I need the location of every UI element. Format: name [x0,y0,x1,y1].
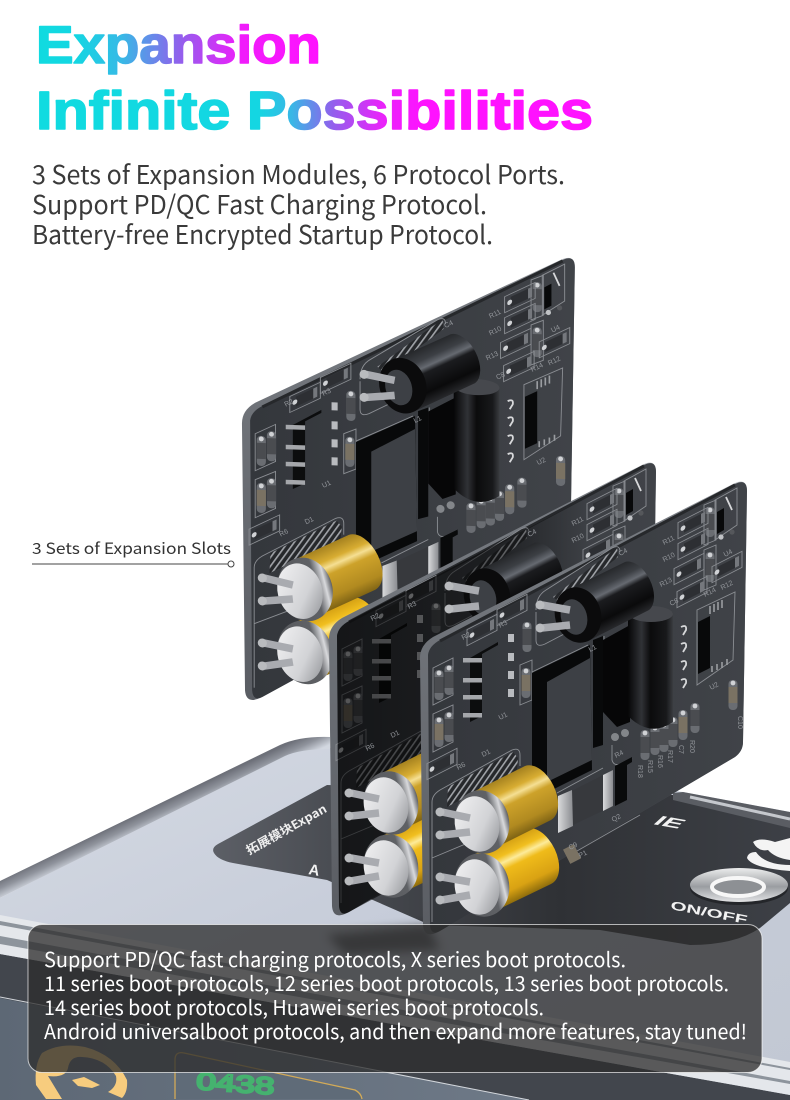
panel letters IE: IE [649,813,690,832]
rear card silkscreen labels: R2 [283,398,295,409]
front card silkscreen labels: R10 [662,552,676,564]
front card silkscreen labels: D1 [481,748,492,759]
info panel [28,924,762,1072]
front face edge line [0,997,529,1100]
rear card silkscreen labels: R13 [485,351,500,362]
device top surface [0,748,790,1100]
on/off label: ON/OFF [669,898,749,927]
front card silkscreen labels: R12 [720,580,734,592]
front card silkscreen labels: R14 [703,587,717,599]
info panel text [44,943,747,1045]
icon: mascot white [747,838,790,871]
front card silkscreen labels: R20 [688,740,695,753]
middle card silkscreen labels: D1 [390,729,401,740]
device back edge bevel [0,737,330,898]
front card silkscreen labels: P1 [578,850,589,860]
icon: power button [690,868,788,905]
front card silkscreen labels: R13 [659,577,673,589]
rear card silkscreen labels: C8 [495,372,507,382]
front card silkscreen labels: R11 [662,535,676,547]
device dark front band [0,954,790,1100]
front card silkscreen labels: R6 [456,761,467,772]
rear card silkscreen labels: U1 [321,480,332,490]
info panel text: 14 series boot protocols, Huawei series boot protocols. [44,991,544,1021]
rear card silkscreen labels: R12 [547,356,562,367]
subtitle text block [32,155,565,252]
rear card silkscreen labels: D1 [304,516,315,526]
subtitle text block: Support PD/QC Fast Charging Protocol. [32,185,487,222]
front card silkscreen labels: R15 [646,760,653,773]
front card silkscreen labels: C7 [677,745,684,754]
module card: front [420,482,747,934]
title: Expansion [36,16,321,75]
info panel text: 11 series boot protocols, 12 series boot protocols, 13 series boot protocols. [44,967,729,997]
info panel text: Support PD/QC fast charging protocols, X series boot protocols. [44,943,626,973]
title [36,16,593,141]
callout: expansion slots [32,537,234,567]
front card silkscreen labels: C10 [736,716,743,729]
rear card silkscreen labels: U4 [550,324,562,334]
middle card silkscreen labels: R2 [370,612,381,623]
front card silkscreen labels: R18 [636,765,643,778]
rear card silkscreen labels: R11 [488,309,502,320]
rear card silkscreen labels: L1 [413,415,423,425]
front rail stripes [0,915,790,1095]
front card silkscreen labels: R3 [498,619,509,630]
device front face [0,998,529,1100]
middle card silkscreen labels: R6 [365,742,376,753]
front card silkscreen labels: C9 [568,841,579,852]
title: Infinite Possibilities [36,81,593,141]
front card silkscreen labels: U2 [709,681,720,692]
middle card silkscreen labels: R3 [407,600,418,611]
dark control panel [213,785,790,945]
middle card silkscreen labels: R10 [571,533,585,545]
rear card silkscreen labels [278,301,562,548]
module card: middle [329,463,656,915]
module card: rear [242,247,575,711]
subtitle text block: Battery-free Encrypted Startup Protocol. [32,215,493,252]
display frame [175,1053,362,1100]
rim highlight [690,797,790,819]
icon: gold mascot [36,1045,127,1099]
card contact shadow [327,925,440,955]
front card silkscreen labels: U1 [498,711,509,722]
front card silkscreen labels: R4 [614,749,625,760]
panel letter A: A [307,861,321,880]
front card silkscreen labels: R16 [656,755,663,768]
rear card silkscreen labels: C4 [443,320,455,330]
middle card silkscreen labels: C4 [527,528,538,539]
rear card silkscreen labels: U2 [536,457,547,467]
callout: expansion slots: 3 Sets of Expansion Slots [32,537,231,559]
front card silkscreen labels: C8 [669,597,680,608]
subtitle text block: 3 Sets of Expansion Modules, 6 Protocol Ports. [32,155,565,192]
front card silkscreen labels: L1 [588,644,598,654]
display digits: 0438 [196,1068,275,1100]
panel label chinese and english: 拓展模块Expan [243,800,330,858]
front card silkscreen labels: R2 [461,631,472,642]
front card silkscreen labels: Q2 [611,813,622,824]
panel rear silver rim [673,792,790,828]
rear card silkscreen labels: R3 [321,388,332,398]
rear card silkscreen labels: R10 [488,326,503,337]
rear card silkscreen labels: R14 [530,362,545,374]
front card silkscreen labels: U4 [723,548,734,559]
front card silkscreen labels: R17 [666,750,673,763]
middle card silkscreen labels [365,516,585,753]
info panel text: Android universalboot protocols, and then expand more features, stay tuned! [44,1015,747,1045]
base device [0,737,790,1100]
front card silkscreen labels [456,535,743,860]
rear card silkscreen labels: R6 [278,528,290,538]
front card silkscreen labels: C4 [618,547,629,558]
middle card silkscreen labels: R11 [571,516,585,528]
